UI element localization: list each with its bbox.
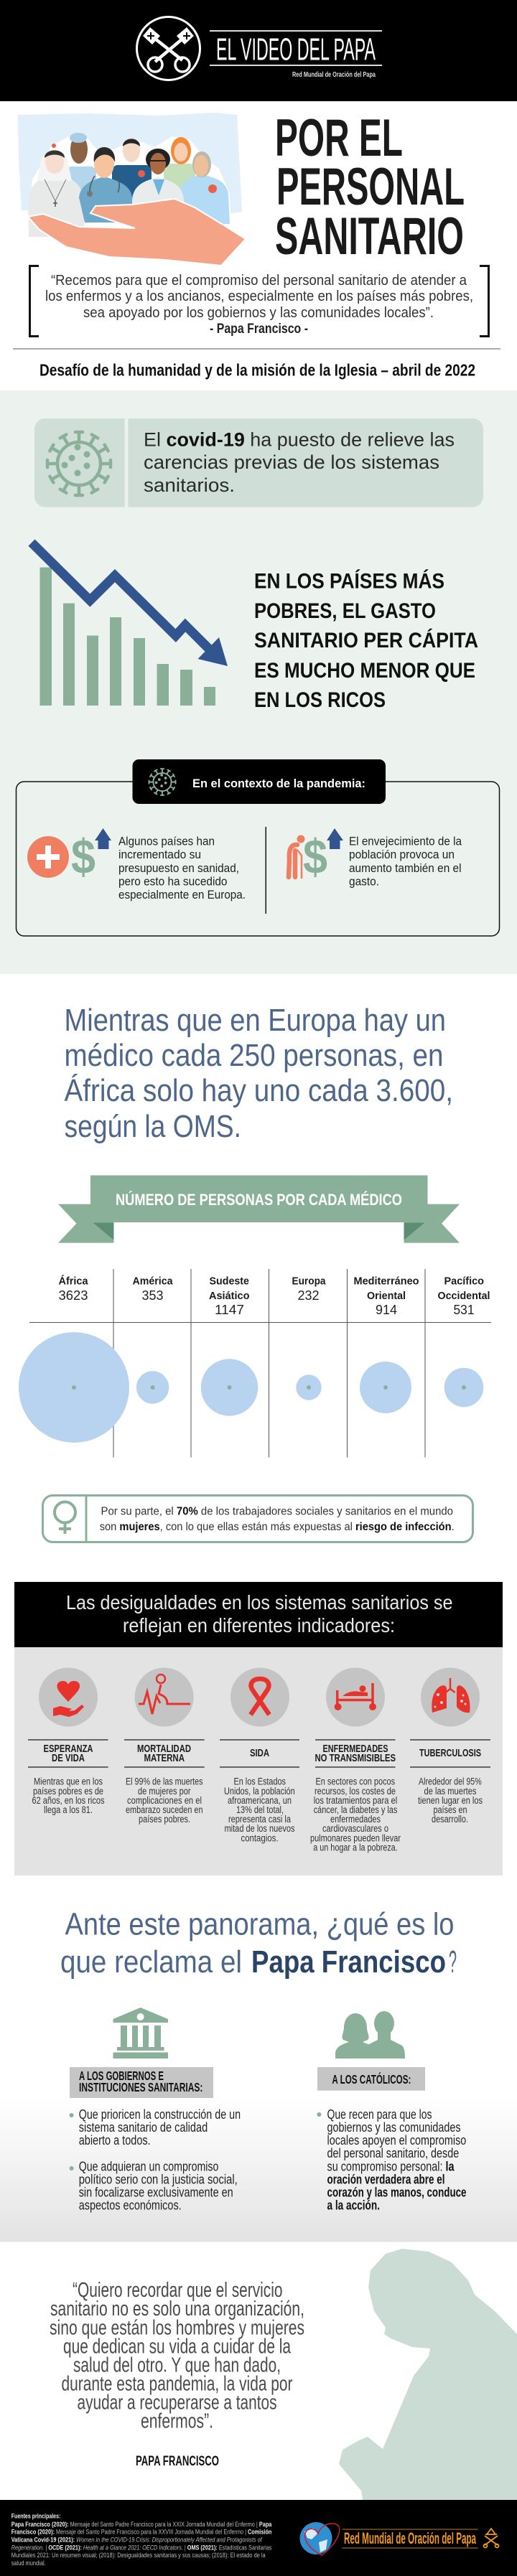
label: governments: INSTITUCIONES SANITARIAS: [79, 2080, 202, 2094]
doctors statement: médico cada 250 personas, en [65, 1038, 444, 1073]
women text: son mujeres, con lo que ellas están más expuestas al riesgo de infección. [100, 1521, 455, 1533]
icon: institution building [113, 2008, 168, 2059]
bullet: catholics: del personal sanitario, desde [327, 2146, 459, 2160]
text: budgets: presupuesto en sanidad, [118, 861, 239, 875]
logo wordmark: EL VIDEO DEL PAPA [216, 32, 376, 67]
text: budgets: incrementado su [118, 848, 201, 861]
icon: virus [47, 432, 111, 495]
bullet: catholics: locales apoyen el compromiso [327, 2133, 466, 2148]
bullet: catholics: a la acción. [327, 2198, 380, 2213]
indicator: AIDS [220, 1668, 299, 1844]
footer [0, 2500, 517, 2576]
column: África: 3623 [59, 1288, 88, 1303]
per-capita statement: EN LOS RICOS [254, 688, 386, 712]
indicator: life expectancy: DE VIDA [52, 1752, 85, 1764]
column: Pacífico Occidental [438, 1276, 490, 1407]
indicator: AIDS: afroamericana, un [228, 1795, 292, 1806]
indicator: maternal mortality: embarazo suceden en [126, 1804, 202, 1815]
closing quote [50, 2279, 304, 2469]
bullets: governments: sistema sanitario de calidad [79, 2120, 208, 2135]
column: América [132, 1276, 173, 1404]
panel: inequalities [14, 1582, 503, 1875]
indicator: maternal mortality [124, 1668, 205, 1825]
indicator: AIDS: 13% del total, [236, 1804, 284, 1815]
bullets: governments: político serio con la justicia social, [79, 2173, 238, 2187]
indicator: AIDS: Unidos, la población [224, 1786, 295, 1797]
column: Sudeste Asiático [201, 1276, 258, 1416]
pope quote with brackets: sea apoyado por los gobiernos y las comunidades locales”. [83, 305, 434, 321]
indicator: non-communicable diseases: ENFERMEDADES [323, 1743, 388, 1755]
closing quote: PAPA FRANCISCO [136, 2454, 219, 2469]
icon: budget increase: $ [71, 830, 96, 884]
text: ageing: aumento también en el [349, 861, 461, 875]
per-capita statement: SANITARIO PER CÁPITA [254, 628, 478, 652]
doctors statement: Mientras que en Europa hay un [65, 1003, 446, 1038]
sources [11, 2513, 272, 2567]
text: ageing: gasto. [349, 874, 379, 889]
text: ageing: El envejecimiento de la [349, 834, 462, 848]
context header pill [132, 759, 386, 804]
arrow [32, 543, 228, 666]
nun [28, 144, 85, 237]
indicator: life expectancy: ESPERANZA [43, 1743, 93, 1755]
column: Europa: Europa [292, 1276, 326, 1288]
silhouette: praying pope [339, 2249, 517, 2500]
column: Mediterráneo Oriental: Oriental [367, 1291, 406, 1302]
sources: Regeneration. | OCDE (2021): Health at a Glance 2021: OECD Indicators. | OMS (2021): Estadísticas Sanitarias [11, 2544, 272, 2552]
indicator: maternal mortality: MATERNA [144, 1752, 185, 1764]
indicator: non-communicable diseases: En sectores con pocos [316, 1776, 395, 1787]
closing quote: que dedican su vida a cuidar de la [63, 2335, 292, 2358]
column: Mediterráneo Oriental: 914 [376, 1303, 397, 1317]
closing quote: enfermos”. [141, 2410, 213, 2433]
dark doctor [66, 133, 96, 202]
bullet: catholics: oración verdadera abre el [327, 2173, 445, 2187]
doctors statement [65, 1003, 453, 1144]
icon: orange keys [484, 2529, 498, 2548]
context header pill: En el contexto de la pandemia: [192, 777, 365, 790]
column: Pacífico Occidental: 531 [454, 1303, 474, 1317]
closing quote: sino que están los hombres y mujeres [50, 2316, 304, 2339]
bullet: catholics [317, 2107, 467, 2213]
icon: female symbol [55, 1502, 75, 1534]
logo wordmark: Red Mundial de Oración del Papa [292, 71, 376, 79]
hand [28, 199, 246, 266]
indicator: life expectancy [28, 1668, 108, 1815]
per-capita statement: POBRES, EL GASTO [254, 599, 436, 623]
pope quote with brackets: - Papa Francisco - [210, 322, 308, 337]
title: POR EL [275, 109, 403, 167]
bullets: governments: aspectos económicos. [79, 2198, 182, 2213]
icon: two people [335, 2011, 405, 2059]
panel: governments [70, 2008, 241, 2213]
indicator: tuberculosis: Alrededor del 95% [419, 1776, 482, 1787]
indicator: non-communicable diseases: los tratamientos para el [314, 1795, 397, 1806]
icon: budget increase [27, 828, 111, 884]
pope quote with brackets [30, 266, 488, 337]
panel: catholics [317, 2011, 467, 2213]
column: Europa [292, 1276, 326, 1400]
column: Pacífico Occidental: Occidental [438, 1291, 490, 1302]
indicator: maternal mortality: complicaciones en el [127, 1795, 202, 1806]
text: budgets: especialmente en Europa. [118, 888, 246, 901]
indicator: non-communicable diseases: enfermedades [330, 1814, 381, 1825]
covid text: carencias previas de los sistemas [144, 451, 439, 473]
indicator: non-communicable diseases: cáncer, la diabetes y las [314, 1804, 397, 1815]
heading: what the pope asks: Papa Francisco [251, 1944, 446, 1980]
closing quote: ayudar a recuperarse a tantos [78, 2392, 277, 2415]
panel: covid section background [0, 390, 517, 974]
bullet: catholics: corazón y las manos, conduce [327, 2186, 467, 2200]
doctors statement: África solo hay uno cada 3.600, [65, 1073, 453, 1108]
illustration: health workers held in a hand [18, 113, 246, 266]
column: América: 353 [142, 1288, 164, 1303]
text: budgets: Algunos países han [118, 834, 215, 848]
panel heading: reflejan en diferentes indicadores: [123, 1614, 395, 1636]
ribbon heading: NÚMERO DE PERSONAS POR CADA MÉDICO [116, 1191, 402, 1209]
text: ageing [349, 834, 462, 889]
label: governments: A LOS GOBIERNOS E [79, 2069, 164, 2083]
sources: Fuentes principales: [11, 2513, 60, 2521]
indicator: tuberculosis [410, 1668, 490, 1825]
logo wordmark [210, 30, 382, 79]
indicator: AIDS: representa casi la [228, 1814, 291, 1825]
older doctor [181, 151, 230, 224]
covid text: El covid-19 ha puesto de relieve las [144, 429, 455, 451]
text: budgets [118, 834, 246, 901]
indicator: maternal mortality: MORTALIDAD [137, 1743, 191, 1755]
icon: ageing population cost [289, 828, 343, 884]
text: ageing: población provoca un [349, 848, 455, 861]
sources: Francisco (2020): Mensaje del Santo Padre Francisco para la XXVIII Jornada Mundial del Enfermo | Comisión [11, 2529, 272, 2537]
heading: what the pope asks: que reclama el [60, 1944, 242, 1980]
indicator: tuberculosis: de las muertes [424, 1786, 477, 1797]
indicator: AIDS: mitad de los nuevos [224, 1823, 295, 1834]
indicator: AIDS: En los Estados [234, 1776, 286, 1787]
indicator: non-communicable diseases: a un hogar a la pobreza. [313, 1842, 398, 1853]
per-capita statement [254, 568, 478, 712]
indicator: life expectancy: llega a los 81. [44, 1804, 93, 1815]
bullets: governments: sin focalizarse exclusivamente en [79, 2186, 233, 2200]
male doctor in scrubs [79, 147, 132, 223]
indicator: tuberculosis: tienen lugar en los [418, 1795, 483, 1806]
heading: what the pope asks [60, 1907, 457, 1980]
indicator: maternal mortality: de mujeres por [138, 1786, 191, 1797]
female doctor with glasses [132, 149, 184, 212]
per-capita statement: EN LOS PAÍSES MÁS [254, 568, 444, 593]
panel: pandemic context [16, 759, 500, 936]
indicator: non-communicable diseases: NO TRANSMISIBLES [315, 1752, 396, 1764]
column: África: África [59, 1275, 88, 1288]
red-haired nurse [164, 137, 195, 189]
sources: Vaticana Covid-19 (2021): Women in the COVID-19 Crisis: Disproportionately Affected and Protagonists of [11, 2537, 263, 2544]
indicator: AIDS: contagios. [241, 1833, 279, 1844]
doctors statement: según la OMS. [65, 1109, 241, 1144]
covid text [144, 429, 455, 496]
covid text: sanitarios. [144, 474, 235, 496]
indicator: tuberculosis: países en [434, 1804, 467, 1815]
column: Mediterráneo Oriental: Mediterráneo [353, 1276, 419, 1288]
text: budgets: pero esto ha sucedido [118, 874, 227, 889]
indicator: tuberculosis: desarrollo. [432, 1814, 468, 1825]
indicator: maternal mortality: El 99% de las muertes [126, 1776, 203, 1787]
column: Sudeste Asiático: Sudeste [210, 1276, 249, 1288]
bullets: governments: Que prioricen la construcción de un [79, 2107, 241, 2122]
bullet: catholics: su compromiso personal: la [327, 2160, 455, 2174]
bubble table: people per doctor [19, 1269, 491, 1457]
column: África [19, 1275, 129, 1443]
icon: globe and heart [300, 2522, 340, 2555]
bar chart with falling arrow [32, 543, 228, 706]
label: governments [70, 2067, 213, 2098]
indicator: life expectancy: países pobres es de [33, 1786, 103, 1797]
closing quote: “Quiero recordar que el servicio [73, 2279, 283, 2302]
indicator: non-communicable diseases: pulmonares pueden llevar [310, 1833, 401, 1844]
bullets: governments: abierto a todos. [79, 2133, 151, 2148]
icon: crossed keys logo [136, 17, 200, 80]
heading: what the pope asks: Ante este panorama, ¿qué es lo [65, 1907, 454, 1942]
panel: covid callout [34, 418, 483, 507]
indicator: non-communicable diseases [310, 1668, 401, 1853]
bullets: governments [70, 2107, 241, 2213]
title [275, 109, 465, 266]
text: ? [449, 1944, 457, 1980]
navy doctor [112, 138, 152, 201]
panel heading [66, 1591, 452, 1636]
sources: salud mundial. [11, 2559, 46, 2567]
indicator: life expectancy: Mientras que en los [34, 1776, 103, 1787]
column: Mediterráneo Oriental [353, 1276, 419, 1413]
per-capita statement: ES MUCHO MENOR QUE [254, 659, 475, 683]
header band [0, 0, 517, 101]
indicator: non-communicable diseases: cardiovasculares o [322, 1823, 388, 1834]
bullet: catholics: gobiernos y las comunidades [327, 2120, 461, 2135]
indicator: tuberculosis: TUBERCULOSIS [419, 1747, 481, 1759]
pope quote with brackets: los enfermos y a los ancianos, especialmente en los países más pobres, [45, 289, 473, 304]
ribbon heading [58, 1176, 460, 1243]
closing quote: salud del otro. Y que han dado, [73, 2353, 281, 2376]
indicator: maternal mortality: países pobres. [139, 1814, 190, 1825]
women text [100, 1506, 455, 1533]
column: Pacífico Occidental: Pacífico [444, 1276, 484, 1288]
sources: Mundiales 2021: Un resumen visual; (2018): Desigualdades sanitarias y sus causas; (2018): El estado de la [11, 2552, 266, 2559]
bullets: governments: Que adquieran un compromiso [79, 2160, 218, 2174]
women text: Por su parte, el 70% de los trabajadores sociales y sanitarios en el mundo [101, 1506, 453, 1517]
column: América: América [132, 1276, 173, 1288]
column: Sudeste Asiático: Asiático [209, 1291, 250, 1302]
sources: Papa Francisco (2020): Mensaje del Santo Padre Francisco para la XXIX Jornada Mundial del Enfermo | Papa [11, 2521, 272, 2529]
column: Europa: 232 [297, 1288, 319, 1303]
panel heading: Las desigualdades en los sistemas sanitarios se [66, 1591, 452, 1613]
label: catholics: A LOS CATÓLICOS: [332, 2071, 411, 2086]
indicator: AIDS: SIDA [250, 1747, 269, 1759]
callout: women workers [43, 1495, 472, 1542]
closing quote: sanitario no es solo una organización, [50, 2298, 304, 2320]
bullet: catholics: Que recen para que los [327, 2107, 432, 2122]
column: Sudeste Asiático: 1147 [215, 1303, 244, 1317]
label: catholics [317, 2067, 425, 2091]
pope quote with brackets: “Recemos para que el compromiso del personal sanitario de atender a [51, 273, 467, 289]
indicator: non-communicable diseases: recursos, los costes de [315, 1786, 396, 1797]
indicator: life expectancy: 62 años, en los ricos [32, 1795, 105, 1806]
closing quote: durante esta pandemia, la vida por [62, 2372, 293, 2395]
icon: ageing population cost: $ [303, 830, 327, 884]
